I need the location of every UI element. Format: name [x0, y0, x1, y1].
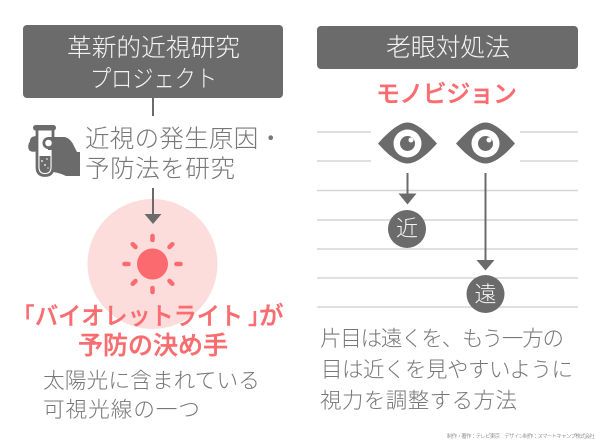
- connector line: [152, 98, 154, 116]
- panel: myopia research project: [12, 25, 284, 422]
- icon: sun: [124, 236, 180, 292]
- heading: presbyopia countermeasure: 老眼対処法: [386, 34, 510, 62]
- text: violet light explanation: 可視光線の一つ: [43, 397, 200, 422]
- arrow: left eye to near: [398, 173, 416, 204]
- badge: far: [466, 275, 504, 313]
- text: research description: 近視の発生原因・: [85, 125, 283, 153]
- arrow: research to violet light: [144, 188, 162, 224]
- heading: presbyopia countermeasure: [317, 26, 578, 69]
- heading: monovision: モノビジョン: [376, 81, 517, 108]
- headline: violet light: [12, 302, 284, 360]
- headline: violet light: 」: [248, 304, 271, 329]
- text: monovision explanation: [320, 327, 573, 413]
- text: research description: [85, 125, 283, 183]
- headline: violet light: バイオレットライト: [35, 304, 243, 330]
- badge: far: 遠: [474, 282, 497, 307]
- text: monovision explanation: 目は近くを見やすいように: [321, 358, 573, 382]
- arrow: right eye to far: [476, 173, 494, 270]
- text: violet light explanation: 太陽光に含まれている: [43, 368, 260, 393]
- icon: hand holding test tube: [28, 125, 80, 176]
- heading: myopia research project: [23, 25, 283, 98]
- circle: pink sun background: [88, 199, 218, 329]
- icon: right eye: [456, 122, 515, 164]
- headline: violet light: 「: [12, 304, 35, 329]
- headline: violet light: 予防の決め手: [78, 332, 228, 360]
- heading: myopia research project: プロジェクト: [90, 66, 217, 93]
- heading: myopia research project: 革新的近視研究: [67, 34, 240, 62]
- panel: presbyopia countermeasure: [317, 26, 578, 413]
- text: monovision explanation: 片目は遠くを、もう一方の: [320, 327, 564, 351]
- credit line: 制作・著作：テレビ東京 デザイン制作：スマートキャンプ株式会社: [447, 432, 595, 440]
- text: violet light explanation: [43, 368, 260, 422]
- icon: left eye: [378, 122, 437, 164]
- headline: violet light: が: [259, 302, 284, 330]
- badge: near: 近: [396, 216, 418, 241]
- text: research description: 予防法を研究: [85, 155, 235, 183]
- badge: near: [388, 210, 426, 248]
- text: monovision explanation: 視力を調整する方法: [320, 389, 517, 413]
